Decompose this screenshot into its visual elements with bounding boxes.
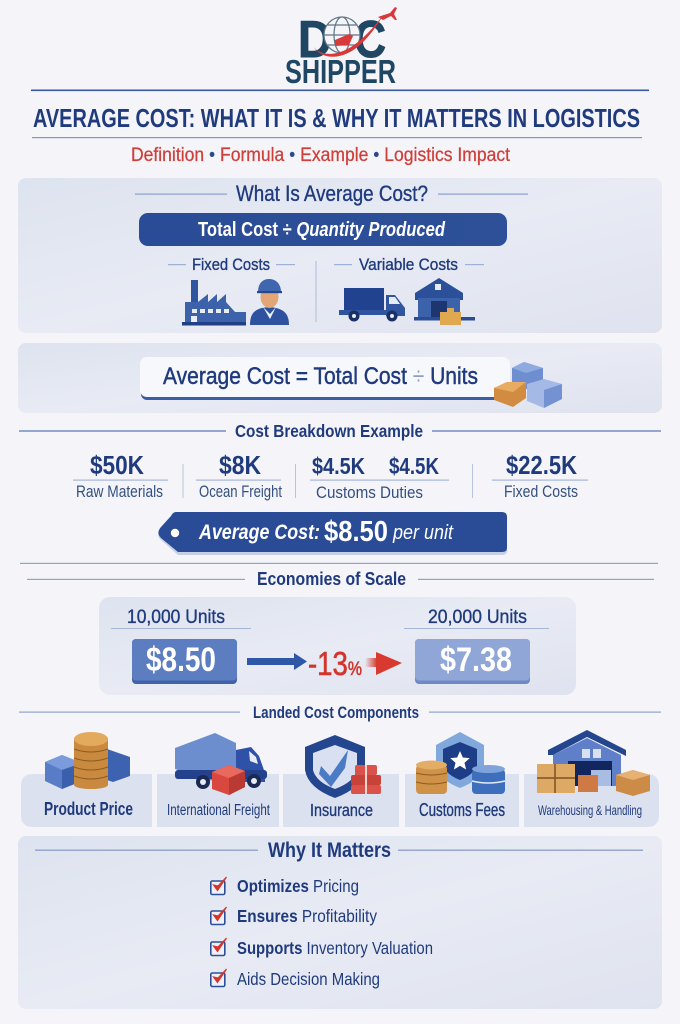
cost item: customs duties: Customs Duties: [316, 484, 423, 502]
card: product price: [21, 732, 152, 827]
section: cost breakdown heading: Cost Breakdown Example: [235, 421, 423, 441]
logo: [285, 7, 397, 90]
reduction percentage: -13%: [308, 645, 362, 682]
10,000 units label: 10,000 Units: [127, 607, 225, 628]
formula button: Total Cost ÷ Quantity Produced: [198, 219, 446, 241]
label: Insurance: [310, 800, 373, 820]
price box: $8.50: $8.50: [146, 641, 216, 679]
average cost tag: [158, 512, 507, 555]
checklist item: ensures profitability: Ensures Profitability: [237, 906, 377, 926]
variable costs label: Variable Costs: [359, 255, 458, 274]
checklist item: supports inventory valuation: Supports Inventory Valuation: [237, 938, 433, 958]
label: Customs Fees: [419, 800, 505, 820]
icon: boxes and coins: [45, 732, 130, 789]
formula card: [140, 357, 510, 400]
heading rule left: [135, 194, 227, 195]
cost item: raw materials: Raw Materials: [76, 483, 163, 501]
logo: SHIPPER: [285, 53, 396, 90]
cost item: fixed costs: Fixed Costs: [504, 483, 578, 501]
arrow: blue: [247, 653, 307, 670]
card: insurance: [283, 735, 399, 827]
icon: truck and box: [175, 733, 267, 795]
cost item: customs duties: $4.5K: [312, 453, 365, 479]
cost item: customs duties: [310, 453, 449, 502]
card: customs fees: [405, 732, 519, 827]
formula card: Average Cost = Total Cost ÷ Units: [163, 363, 478, 390]
panel: economies of scale: [99, 597, 576, 695]
logo: C: [354, 11, 386, 69]
logo globe: [324, 17, 360, 53]
panel: formula: [18, 343, 662, 413]
icon: warehouse with boxes: [414, 278, 475, 325]
cost item: customs duties: $4.5K: [389, 453, 439, 479]
average cost tag: per unit: [392, 522, 454, 544]
formula button: [139, 213, 507, 246]
section: landed cost heading: Landed Cost Components: [253, 703, 419, 722]
icon: boxes: [494, 362, 562, 408]
card: warehousing and handling: [524, 730, 659, 827]
logo ship and swoosh: [313, 7, 397, 57]
icon: truck: [339, 288, 405, 322]
heading: What Is Average Cost?: [236, 181, 428, 206]
icon: warehouse and boxes: [537, 730, 650, 796]
fixed costs label: Fixed Costs: [192, 255, 270, 274]
cost item: ocean freight: [196, 452, 282, 501]
label: International Freight: [167, 802, 271, 819]
cost item: fixed costs: [492, 452, 588, 501]
cost item: ocean freight: Ocean Freight: [199, 483, 282, 501]
icon: shield with star and coins: [416, 732, 505, 794]
price box: $7.38: $7.38: [440, 641, 512, 679]
panel: what is average cost: [18, 178, 662, 333]
price box: $8.50: [132, 639, 237, 684]
logo: D: [298, 11, 332, 69]
cost item: fixed costs: $22.5K: [506, 452, 577, 480]
heading: Why It Matters: [268, 839, 391, 862]
price box: $7.38: [415, 639, 530, 684]
label: Product Price: [44, 799, 133, 819]
panel: why it matters: [18, 836, 662, 1009]
average cost tag: $8.50: [324, 516, 388, 548]
header rule: [31, 90, 649, 91]
cost item: raw materials: $50K: [90, 452, 145, 480]
card: international freight: [157, 733, 279, 827]
section: economies of scale heading: Economies of Scale: [257, 569, 406, 589]
cost item: ocean freight: $8K: [219, 452, 262, 480]
cost item: raw materials: [73, 452, 168, 501]
icon: factory: [182, 280, 246, 326]
icon: shield and boxes: [305, 735, 381, 798]
heading rule right: [438, 194, 528, 195]
checklist item: aids decision making: Aids Decision Making: [237, 969, 380, 989]
average cost tag: Average Cost:: [198, 521, 320, 544]
icon: worker: [250, 279, 289, 325]
arrow: red: [365, 652, 402, 675]
checklist item: optimizes pricing: Optimizes Pricing: [237, 876, 359, 896]
subtitle: Definition • Formula • Example • Logistics Impact: [131, 145, 511, 166]
20,000 units label: 20,000 Units: [428, 607, 527, 628]
